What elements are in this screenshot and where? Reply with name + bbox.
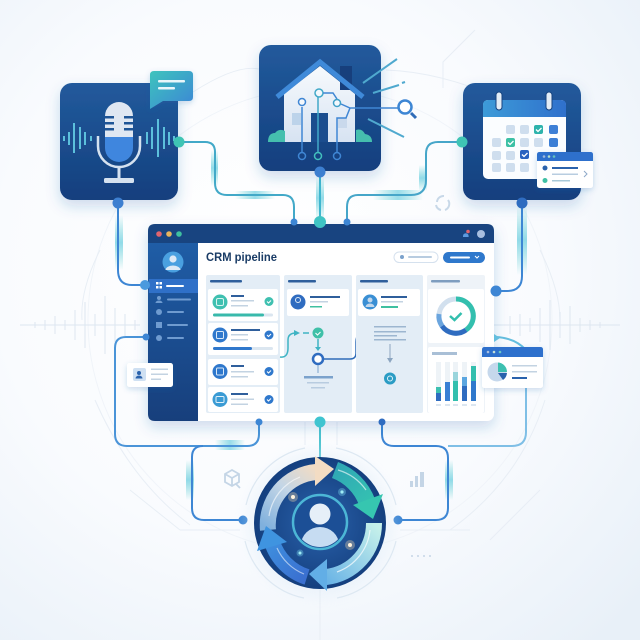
window title bar [148, 224, 494, 243]
card 4 [208, 387, 278, 412]
calendar popup [537, 152, 593, 188]
icon: small bars [410, 472, 424, 487]
icon: circuit lines [298, 89, 398, 160]
column: analytics [427, 275, 485, 413]
title: CRM pipeline [206, 252, 277, 264]
card 2 [208, 323, 278, 355]
panel: microphone card [60, 83, 178, 200]
panel: calendar card [463, 83, 593, 200]
stacked bar chart [428, 347, 484, 413]
arrow: beige [268, 456, 334, 530]
connector nodes [112, 136, 528, 524]
panel: smart home card [259, 45, 416, 171]
decorative dots [411, 555, 431, 557]
icon: microphone [98, 102, 140, 183]
icon: calendar [483, 92, 566, 179]
connector glows [115, 150, 527, 500]
arrow: blue [257, 526, 307, 577]
panel: CRM window [148, 224, 494, 421]
arrow: teal [335, 470, 383, 519]
icon: sound waves [64, 119, 174, 157]
card 3 [208, 359, 278, 385]
icon: cube search [225, 470, 240, 488]
right waveform [494, 300, 620, 350]
column: contact [356, 275, 423, 413]
icon: customer [292, 494, 348, 550]
left waveform [20, 296, 140, 354]
sidebar [148, 243, 198, 421]
column: tasks [206, 275, 280, 413]
donut chart [428, 289, 484, 343]
icon: recycle outline [436, 196, 449, 210]
hub: customer cycle [245, 448, 396, 598]
icon: magnifier with rays [363, 59, 416, 137]
icon: chat bubble [150, 71, 193, 109]
icon: house [268, 62, 372, 142]
connectors [115, 142, 526, 520]
arrow: pale cyan [309, 523, 374, 591]
toolbar buttons [394, 252, 485, 263]
sparkles [288, 488, 355, 556]
pie chart popup [482, 347, 543, 388]
flow diagram [280, 328, 372, 388]
column: flow [280, 275, 372, 413]
contact popup [127, 363, 173, 387]
card 1 [208, 289, 278, 321]
